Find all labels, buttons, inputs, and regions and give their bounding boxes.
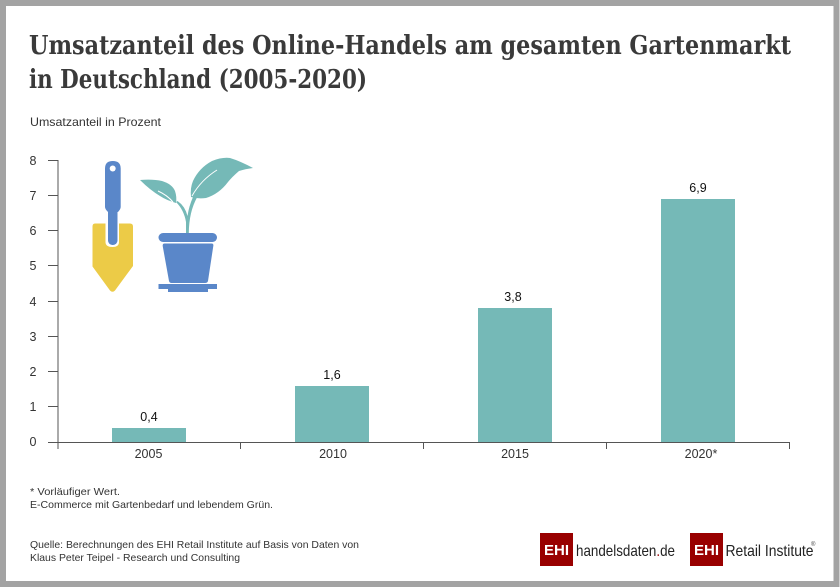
footnote: * Vorläufiger Wert. (30, 486, 120, 498)
y axis labels: 1 (30, 400, 37, 414)
y axis labels: 5 (30, 259, 37, 273)
y axis labels: 4 (30, 295, 37, 309)
logo: EHI Retail Institute (690, 533, 816, 566)
big leaf (191, 158, 253, 198)
title (29, 31, 791, 95)
small leaf (140, 180, 176, 203)
icon: trowel (92, 161, 133, 292)
value labels: 6,9 (689, 181, 707, 195)
y axis labels: 6 (30, 224, 37, 238)
pot (158, 233, 217, 242)
value labels: 3,8 (504, 290, 522, 304)
value labels: 1,6 (323, 368, 341, 382)
title: in Deutschland (2005-2020) (29, 65, 367, 95)
value labels: 0,4 (140, 410, 158, 424)
logo: EHI handelsdaten.de: EHI (544, 542, 569, 559)
icon: plant in pot (140, 158, 253, 292)
y axis labels: 7 (30, 189, 37, 203)
stems (176, 197, 197, 233)
x axis labels: 2010 (319, 447, 347, 461)
y axis labels: 8 (30, 154, 37, 168)
source: Quelle: Berechnungen des EHI Retail Institute auf Basis von Daten von (30, 539, 359, 551)
logo: EHI Retail Institute: Retail Institute (726, 543, 814, 560)
x axis labels: 2015 (501, 447, 529, 461)
source (30, 539, 359, 564)
logo: EHI Retail Institute: EHI (694, 542, 719, 559)
y axis labels: 0 (30, 435, 37, 449)
source: Klaus Peter Teipel - Research und Consulting (30, 552, 240, 564)
x axis labels: 2005 (135, 447, 162, 461)
y axis labels: 3 (30, 330, 37, 344)
footnote (30, 486, 273, 511)
axes (48, 160, 790, 449)
axis title: Umsatzanteil in Prozent (30, 115, 162, 129)
x axis labels (135, 447, 717, 461)
bars (112, 199, 735, 442)
logo: EHI handelsdaten.de (540, 533, 675, 566)
logo: EHI handelsdaten.de: handelsdaten.de (576, 543, 675, 560)
bar chart (30, 154, 790, 461)
x axis labels: 2020* (685, 447, 717, 461)
logo: EHI Retail Institute: ® (811, 541, 816, 548)
y axis labels: 2 (30, 365, 37, 379)
value labels (140, 181, 707, 424)
footnote: E-Commerce mit Gartenbedarf und lebendem Grün. (30, 499, 273, 511)
y axis labels (30, 154, 37, 449)
